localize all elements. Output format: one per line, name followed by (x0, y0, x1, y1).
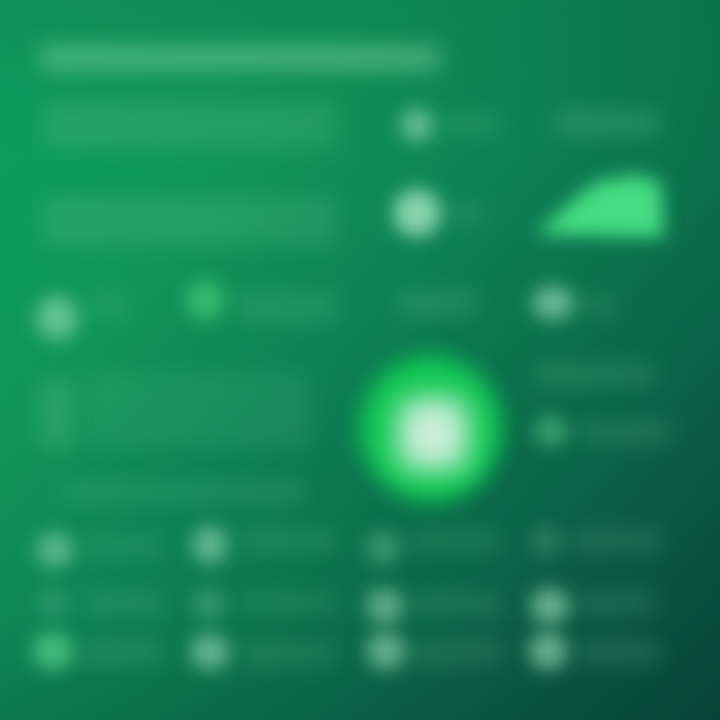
row 2 icon 1 (38, 588, 70, 618)
icon: right feature (532, 286, 574, 320)
label: green feature text (238, 292, 338, 322)
icon: second status dot (393, 189, 441, 237)
row 2 text 2 (242, 592, 337, 614)
row 1 icon 3 (366, 532, 400, 564)
row 3 icon 4 (528, 632, 568, 670)
label: right upper text (535, 364, 655, 386)
heading: lower grid (60, 482, 305, 502)
text block: lower left (85, 372, 310, 448)
label: top status text (442, 115, 502, 133)
row 3 text 2 (242, 642, 337, 666)
label: right feature text (578, 296, 618, 314)
row 1 icon 4 (530, 526, 562, 556)
row 1 icon 1 (36, 532, 74, 568)
row 2 icon 2 (192, 588, 226, 620)
panel: second text block (42, 196, 337, 246)
label: left feature text (88, 290, 128, 320)
icon: right lower dot (534, 416, 568, 446)
row 1 text 4 (572, 530, 662, 552)
row 2 icon 4 (530, 588, 570, 624)
label: middle text (396, 292, 476, 314)
row 3 icon 1 (32, 632, 74, 670)
chart: bright green area (534, 164, 676, 250)
row 2 icon 3 (366, 588, 404, 624)
row 1 text 2 (242, 530, 337, 552)
icon: central glowing circle (348, 344, 515, 515)
row 2 text 3 (412, 592, 502, 616)
label: second status text (448, 204, 484, 222)
row 3 icon 2 (190, 634, 230, 670)
icon: top status dot (400, 108, 434, 142)
panel: lower left block (40, 380, 74, 450)
label: top right text (555, 112, 660, 134)
row 1 text 3 (410, 530, 500, 552)
row 3 icon 3 (366, 632, 406, 670)
panel: upper text block (42, 100, 337, 148)
row 3 text 4 (580, 640, 660, 664)
row 1 text 1 (84, 535, 164, 557)
icon: left feature (36, 296, 78, 340)
icon: green feature (186, 280, 224, 320)
title (40, 46, 440, 70)
row 2 text 1 (84, 592, 164, 614)
glow ring (360, 356, 502, 502)
label: right lower text (580, 422, 670, 442)
glow centre (398, 398, 468, 470)
row 3 text 1 (84, 640, 164, 664)
row 2 text 4 (580, 592, 655, 614)
row 3 text 3 (412, 640, 502, 664)
row 1 icon 2 (192, 526, 228, 564)
